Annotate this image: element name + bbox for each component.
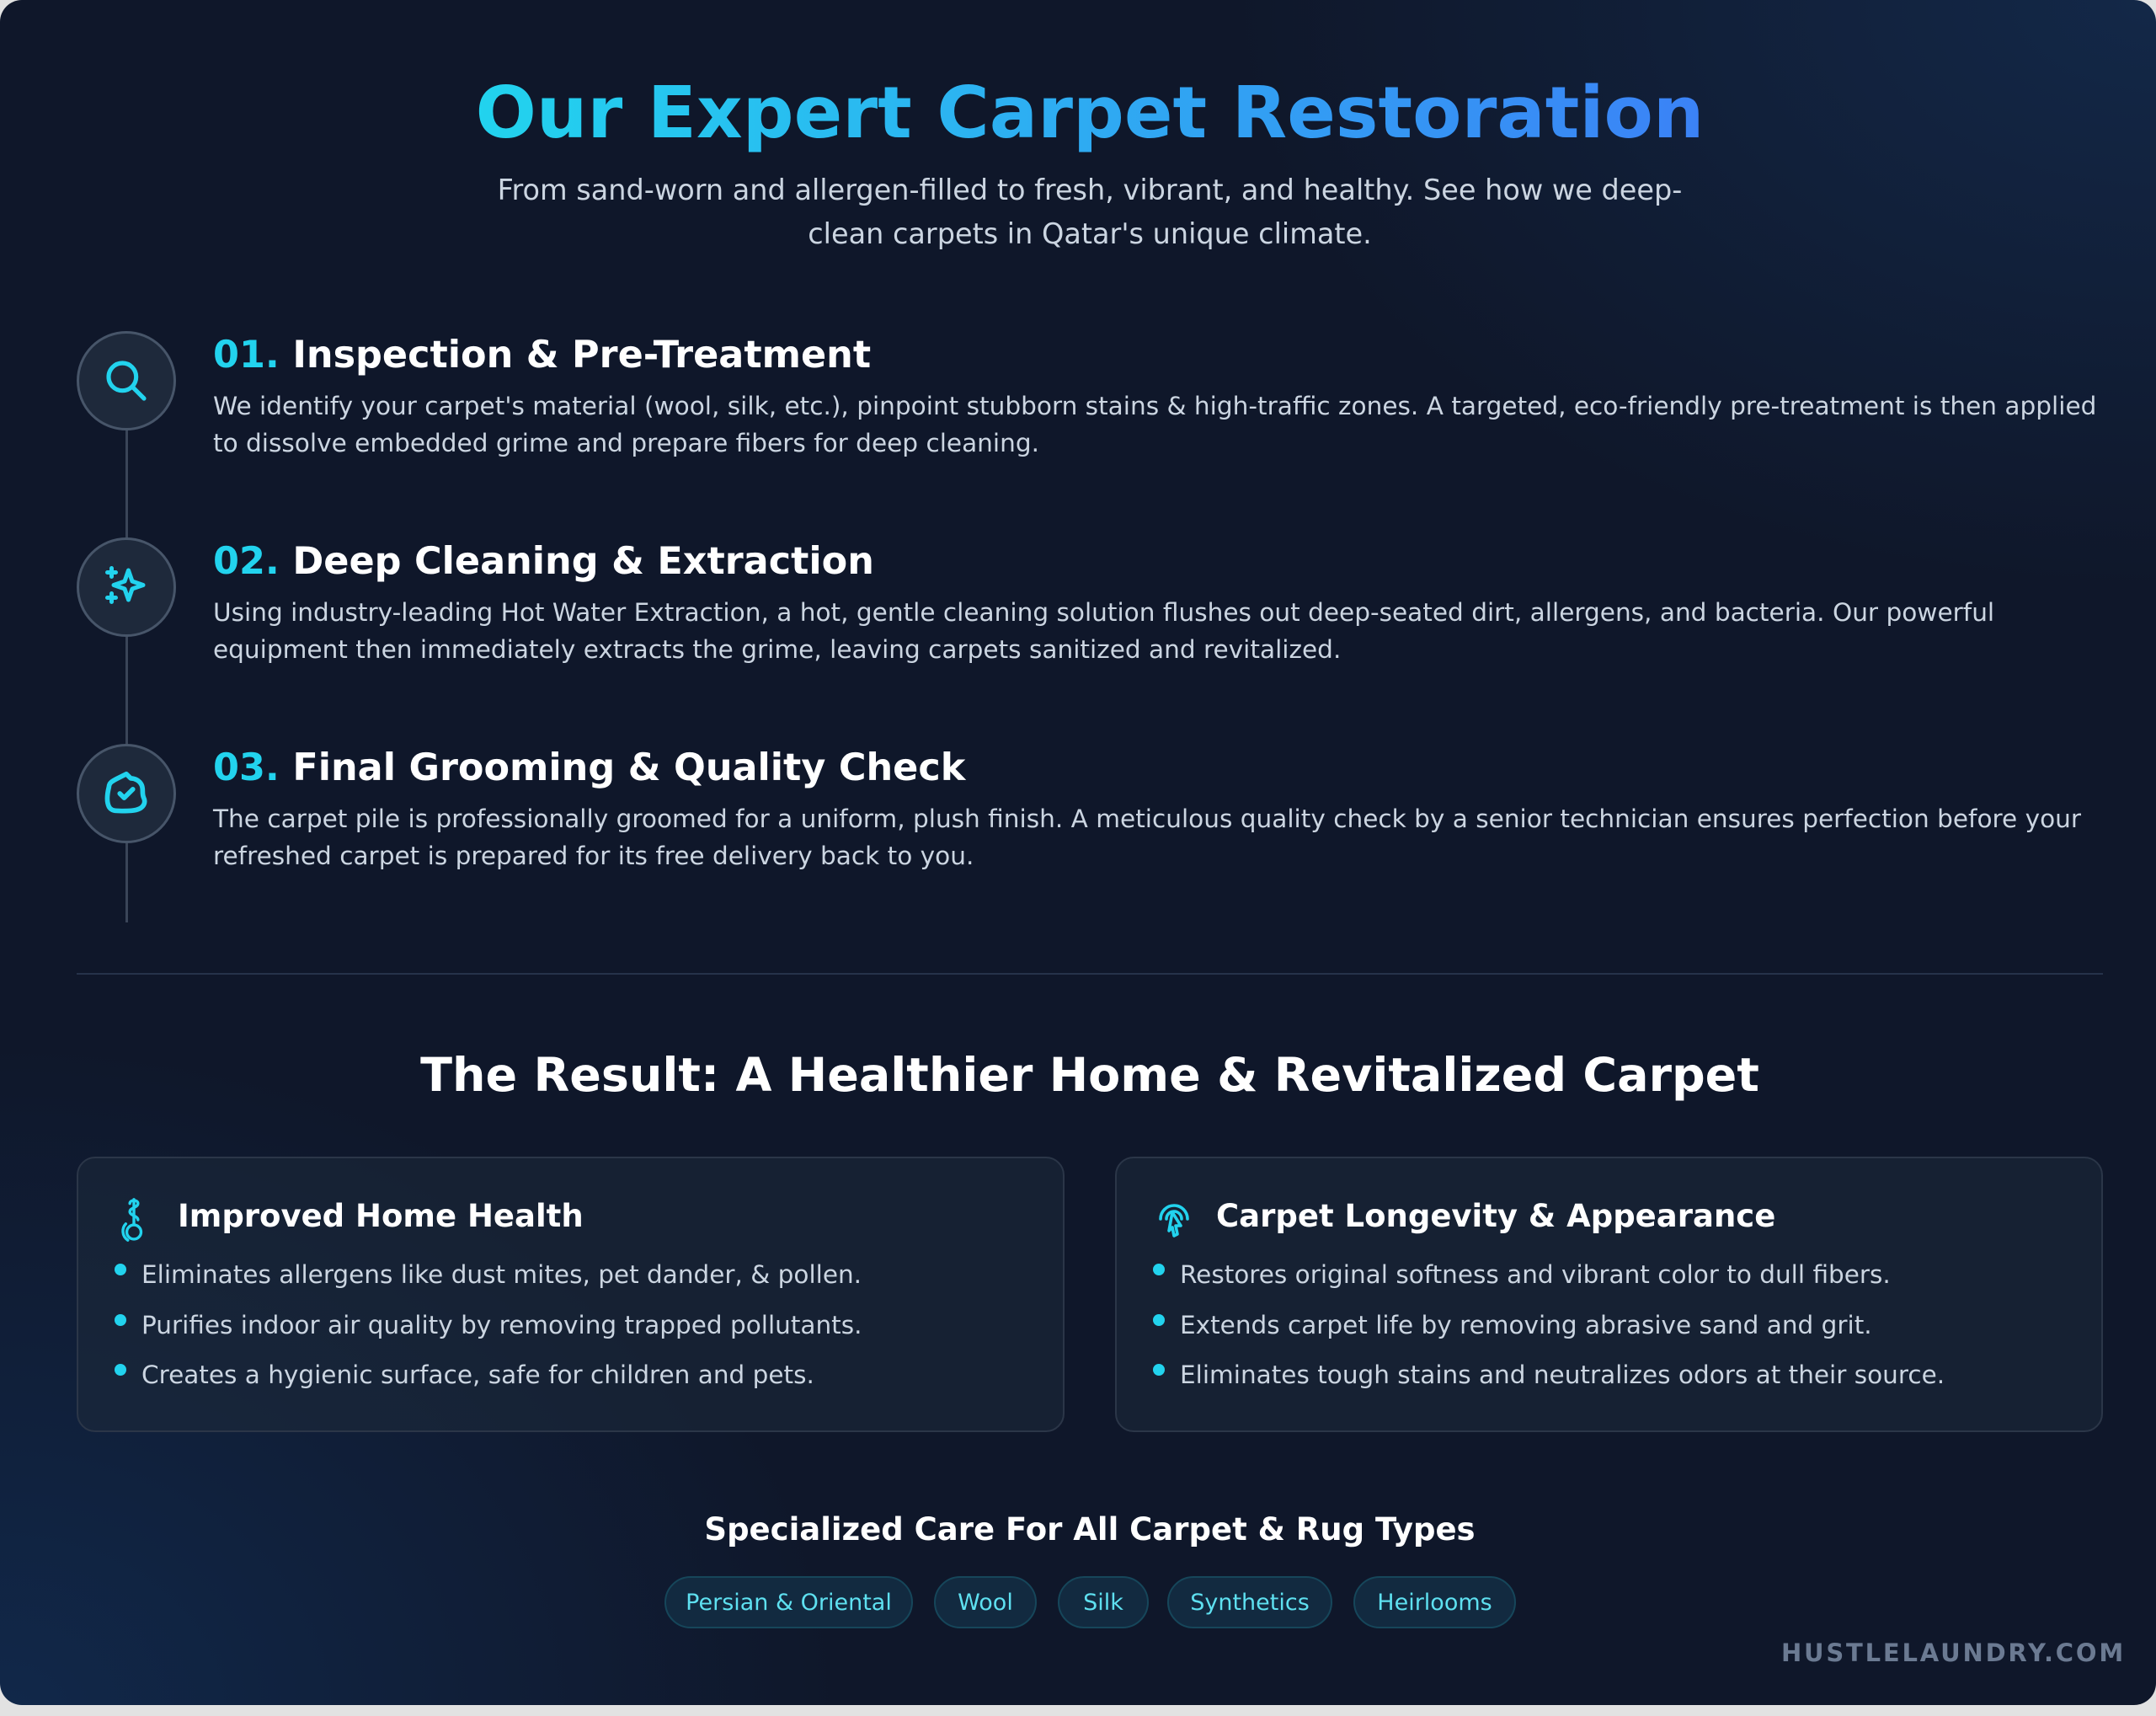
pill: persian	[664, 1576, 913, 1628]
pill: synthetics	[1167, 1576, 1332, 1628]
pill: silk	[1058, 1576, 1149, 1628]
panel: longevity: Eliminates tough stains and neutralizes odors at their source.	[1180, 1361, 1945, 1389]
step 1	[213, 334, 2096, 457]
panel: home health: Improved Home Health	[178, 1198, 584, 1234]
icon: search	[77, 331, 176, 430]
icon: health	[121, 1198, 143, 1242]
step 2: Using industry-leading Hot Water Extraction, a hot, gentle cleaning solution flushes out deep-seated dirt, allergens, and bacteria. Our powerful equipment then immediately extracts the grime, leaving carpets sanitized and revitalized.	[213, 598, 1994, 664]
title: Our Expert Carpet Restoration	[476, 72, 1704, 155]
icon: touch	[1159, 1204, 1189, 1238]
pill: wool: Wool	[958, 1589, 1013, 1616]
panel: home health	[77, 1157, 1065, 1432]
panel: longevity: Restores original softness and vibrant color to dull fibers.	[1180, 1260, 1891, 1289]
pill: persian: Persian & Oriental	[686, 1589, 892, 1616]
icon: quality badge	[77, 744, 176, 843]
panel: home health: Creates a hygienic surface, safe for children and pets.	[141, 1361, 814, 1389]
step 2: 02. Deep Cleaning & Extraction	[213, 540, 874, 583]
footer brand: HUSTLELAUNDRY.COM	[1781, 1638, 2126, 1667]
step 1: 01. Inspection & Pre-Treatment	[213, 334, 871, 377]
result heading: The Result: A Healthier Home & Revitalized Carpet	[420, 1048, 1759, 1103]
pill: synthetics: Synthetics	[1190, 1589, 1310, 1616]
icon: sparkle	[77, 537, 176, 637]
subtitle: From sand-worn and allergen-filled to fresh, vibrant, and healthy. See how we deep-clean carpets in Qatar's unique climate.	[498, 174, 1682, 250]
step 1: We identify your carpet's material (wool, silk, etc.), pinpoint stubborn stains & high-traffic zones. A targeted, eco-friendly pre-treatment is then applied to dissolve embedded grime and prepare fibers for deep cleaning.	[213, 392, 2096, 457]
panel: home health: Purifies indoor air quality by removing trapped pollutants.	[141, 1311, 862, 1339]
timeline line	[125, 379, 128, 922]
pill: heirlooms: Heirlooms	[1377, 1589, 1492, 1616]
step 3: 03. Final Grooming & Quality Check	[213, 746, 965, 789]
step 2	[213, 540, 1994, 664]
step 3: The carpet pile is professionally groomed for a uniform, plush finish. A meticulous quality check by a senior technician ensures perfection before your refreshed carpet is prepared for its free delivery back to you.	[213, 805, 2081, 870]
panel: longevity: Extends carpet life by removing abrasive sand and grit.	[1180, 1311, 1872, 1339]
panel: home health: Eliminates allergens like dust mites, pet dander, & pollen.	[141, 1260, 862, 1289]
panel: longevity: Carpet Longevity & Appearance	[1216, 1198, 1775, 1234]
panel: longevity	[1115, 1157, 2103, 1432]
pill: silk: Silk	[1083, 1589, 1123, 1616]
pill: wool	[934, 1576, 1037, 1628]
specialized heading: Specialized Care For All Carpet & Rug Types	[704, 1511, 1476, 1548]
step 3	[212, 746, 2081, 870]
pill: heirlooms	[1353, 1576, 1516, 1628]
